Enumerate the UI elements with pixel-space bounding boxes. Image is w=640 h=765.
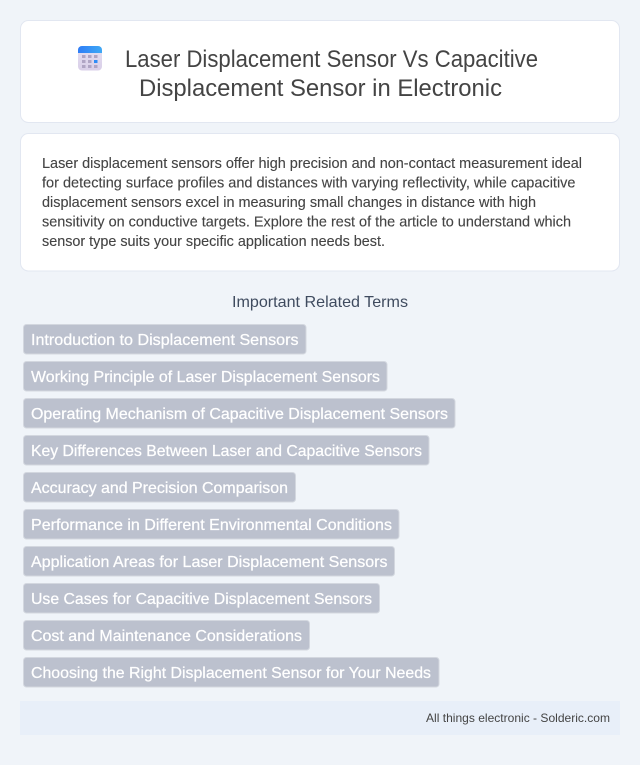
text block: introduction: displacement sensors excel in measuring small changes in distance with high [42, 195, 536, 211]
tag: operating mechanism [24, 398, 455, 428]
tag: application areas [24, 546, 394, 576]
tag: accuracy: Accuracy and Precision Comparison [31, 480, 288, 497]
tag: choosing [24, 658, 439, 687]
tag: use cases [24, 584, 380, 613]
icon: calendar [78, 46, 102, 70]
heading: important related terms: Important Related Terms [232, 294, 408, 311]
tag list [24, 324, 455, 687]
tag: key differences [24, 436, 429, 465]
tag: application areas: Application Areas for Laser Displacement Sensors [31, 554, 388, 571]
tag: key differences: Key Differences Between Laser and Capacitive Sensors [31, 443, 422, 460]
tag: working principle: Working Principle of Laser Displacement Sensors [31, 369, 380, 386]
tag: accuracy [24, 472, 296, 502]
text block: introduction: sensitivity on conductive targets. Explore the rest of the article to understand which [42, 214, 571, 230]
tag: performance [24, 510, 399, 539]
tag: introduction [24, 324, 306, 354]
panel: header [20, 20, 620, 122]
tag: introduction: Introduction to Displacement Sensors [31, 332, 298, 349]
title: Displacement Sensor in Electronic [139, 75, 502, 102]
tag: use cases: Use Cases for Capacitive Displacement Sensors [31, 591, 372, 608]
tag: working principle [24, 362, 387, 391]
text block: introduction: for detecting surface profiles and distances with varying reflectivity, while capacitive [42, 176, 576, 192]
tag: cost and maintenance: Cost and Maintenance Considerations [31, 628, 302, 645]
tag: operating mechanism: Operating Mechanism of Capacitive Displacement Sensors [31, 406, 448, 423]
tag: choosing: Choosing the Right Displacement Sensor for Your Needs [31, 665, 431, 682]
tag: cost and maintenance [24, 620, 310, 650]
panel: introduction [20, 134, 620, 271]
title [125, 46, 538, 102]
footer: All things electronic - Solderic.com [426, 711, 610, 725]
text block: introduction: Laser displacement sensors offer high precision and non-contact measurement ideal [42, 156, 582, 172]
title: Laser Displacement Sensor Vs Capacitive [125, 46, 538, 73]
footer [20, 701, 620, 735]
tag: performance: Performance in Different Environmental Conditions [31, 517, 392, 534]
text block: introduction: sensor type suits your specific application needs best. [42, 234, 385, 250]
text block: introduction [42, 156, 582, 250]
